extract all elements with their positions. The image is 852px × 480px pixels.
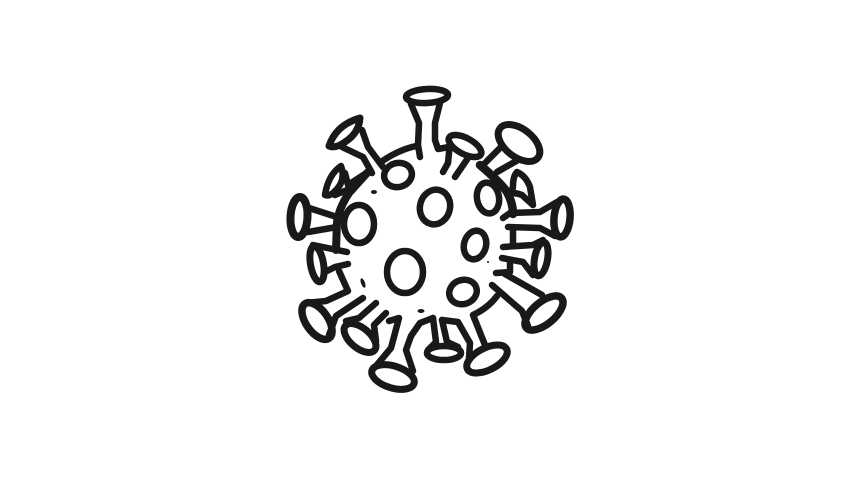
spike: right small upper xyxy=(512,172,533,205)
spike: bottom right xyxy=(442,296,512,379)
spike: upper right xyxy=(485,117,547,172)
spike: lower right large xyxy=(492,262,569,336)
spike: lower left large xyxy=(296,271,363,345)
spike: right small lower xyxy=(502,230,550,277)
spike: left small upper xyxy=(325,166,368,195)
receptor: upper right xyxy=(474,181,502,215)
receptor: top xyxy=(381,160,415,190)
receptor: lower right xyxy=(446,276,480,308)
spike: right large xyxy=(503,198,572,238)
spike: top xyxy=(406,88,449,157)
spike: left large xyxy=(289,197,340,237)
surface specks xyxy=(359,190,489,313)
receptor: large centre xyxy=(387,251,423,293)
spike: bottom small xyxy=(427,318,461,360)
spike: lower left small xyxy=(339,303,386,358)
spike: bottom large xyxy=(369,318,433,394)
spike: left small lower xyxy=(307,245,348,283)
spike: top centre-right small xyxy=(443,130,485,177)
surface receptors xyxy=(344,160,502,308)
receptor: right centre xyxy=(461,228,489,262)
receptor: left xyxy=(344,205,374,243)
receptor: upper centre xyxy=(416,186,454,228)
virus body outline xyxy=(336,146,513,250)
spike: upper left xyxy=(329,118,383,173)
